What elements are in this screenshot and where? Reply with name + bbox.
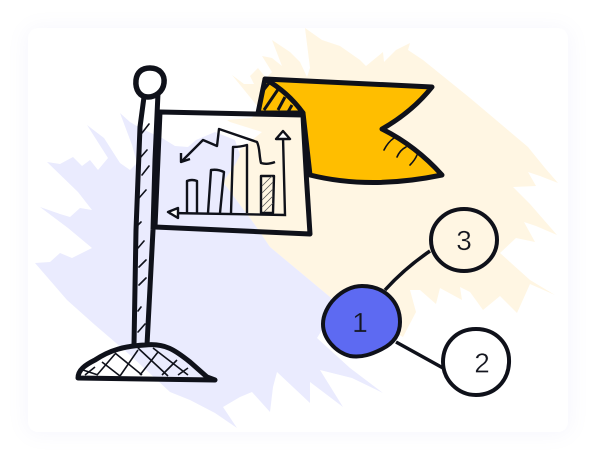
pole marks: [138, 124, 149, 332]
base outline: [78, 345, 215, 380]
node 2: [443, 329, 509, 395]
axis arrowheads: [168, 131, 290, 218]
flag pole: [134, 68, 164, 345]
chart axes: [169, 137, 285, 215]
brush stroke: periwinkle: [35, 113, 383, 428]
card panel: [26, 28, 570, 434]
pole ball: [136, 68, 164, 97]
chart bars: [187, 145, 274, 213]
flag sheet with chart: [155, 112, 310, 234]
node connectors: [385, 251, 443, 368]
base hatching: [83, 348, 188, 376]
fold hatching: [262, 82, 292, 112]
banner tail marks: [384, 138, 417, 165]
trend line with arrow: [181, 129, 275, 164]
node 1: [323, 286, 400, 357]
hatched bar fill: [262, 176, 273, 212]
pole: [134, 93, 158, 345]
brush stroke: cream: [223, 28, 558, 337]
flag base: [78, 345, 215, 380]
node 2: 2: [474, 348, 490, 378]
sheet outline: [155, 112, 310, 234]
banner body: [265, 79, 442, 182]
node 3: 3: [456, 225, 472, 256]
node 3: [431, 209, 497, 271]
flag banner: yellow: [258, 79, 442, 182]
node 1: 1: [352, 307, 368, 338]
banner fold: [258, 79, 303, 113]
